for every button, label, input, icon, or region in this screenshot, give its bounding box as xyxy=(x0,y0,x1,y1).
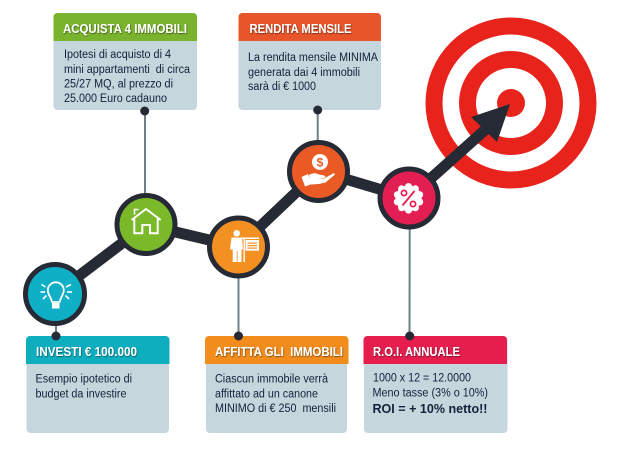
panel: affitta gli immobili xyxy=(205,336,348,433)
icon: house node xyxy=(117,196,175,254)
icon: agent with sign node xyxy=(210,218,268,276)
panel: investi: Esempio ipotetico di xyxy=(36,374,132,386)
connector lines xyxy=(56,110,410,336)
growth line xyxy=(55,129,486,294)
panel: r.o.i. annuale: ROI = + 10% netto!! xyxy=(372,401,488,416)
panel: rendita mensile: RENDITA MENSILE xyxy=(250,22,352,36)
panel: investi: INVESTI € 100.000 xyxy=(36,345,137,359)
panel: acquista 4 immobili xyxy=(54,13,197,110)
panel: r.o.i. annuale: 1000 x 12 = 12.0000 xyxy=(373,373,471,385)
panel: affitta gli immobili: MINIMO di € 250 mensili xyxy=(215,403,336,415)
icon: light bulb node xyxy=(26,264,84,324)
panel: affitta gli immobili: affittato ad un canone xyxy=(215,389,318,401)
panel: acquista 4 immobili: mini appartamenti di circa xyxy=(64,64,191,76)
panel: affitta gli immobili: Ciascun immobile verrà xyxy=(215,374,329,386)
panel: acquista 4 immobili: 25.000 Euro cadauno xyxy=(64,93,167,105)
panel: rendita mensile: sarà di € 1000 xyxy=(248,81,316,93)
panel: r.o.i. annuale: Meno tasse (3% o 10%) xyxy=(372,388,488,400)
panel: investi xyxy=(26,336,170,433)
arrow head xyxy=(471,104,510,142)
panel: acquista 4 immobili: 25/27 MQ, al prezzo di xyxy=(64,78,173,90)
icon: percent badge node xyxy=(380,169,438,227)
panel: r.o.i. annuale: R.O.I. ANNUALE xyxy=(373,345,460,359)
panel: acquista 4 immobili: ACQUISTA 4 IMMOBILI xyxy=(63,22,187,36)
icon: money in hand node xyxy=(290,142,348,200)
panel: investi: budget da investire xyxy=(36,389,126,401)
panel: rendita mensile xyxy=(238,13,381,110)
panel: rendita mensile: generata dai 4 immobili xyxy=(248,67,360,79)
connector dots xyxy=(52,106,414,340)
panel: acquista 4 immobili: Ipotesi di acquisto di 4 xyxy=(64,49,172,61)
icon: target xyxy=(426,18,596,188)
icon: money in hand node: $ xyxy=(317,156,324,170)
panel: rendita mensile: La rendita mensile MINIMA xyxy=(248,52,378,64)
panel: affitta gli immobili: AFFITTA GLI IMMOBILI xyxy=(215,345,343,359)
panel: r.o.i. annuale xyxy=(364,336,508,433)
